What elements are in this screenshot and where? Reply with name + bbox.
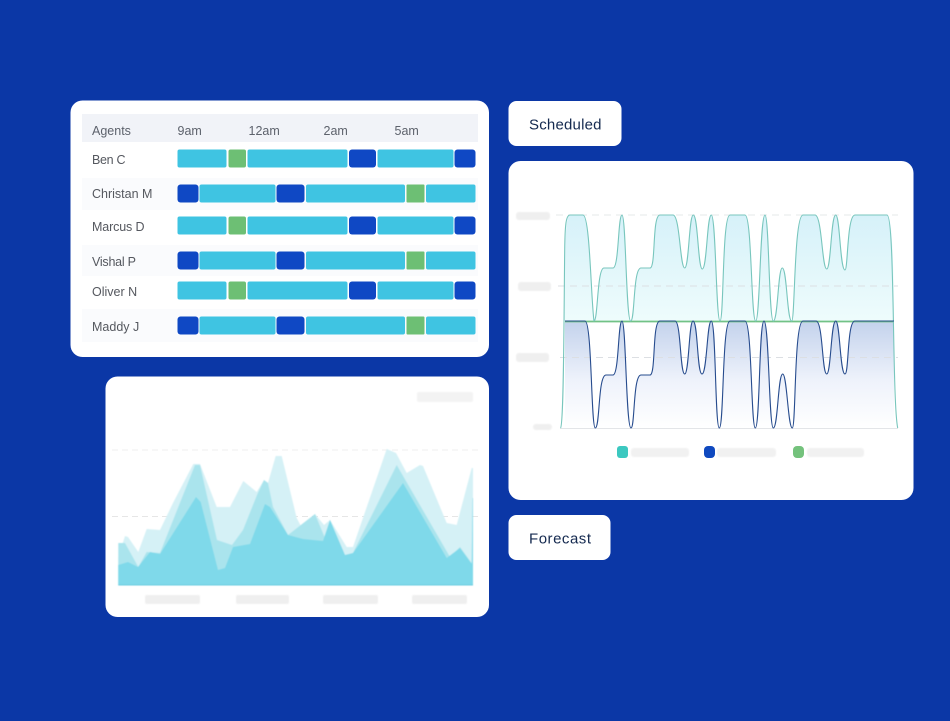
y axis label placeholders (516, 212, 552, 430)
filled area: lower series (565, 321, 894, 428)
x axis label placeholders (145, 595, 467, 604)
panel: area chart (106, 376, 489, 617)
panel: scheduled line chart (508, 161, 914, 500)
area layers (118, 449, 473, 585)
row: Ben C (92, 150, 476, 168)
gridlines (556, 215, 898, 428)
table header row: 2am (324, 124, 348, 138)
legend placeholder pill (417, 392, 473, 402)
row: Ben C: Ben C (92, 153, 126, 167)
label: Forecast (508, 515, 610, 560)
label: Scheduled (508, 101, 622, 146)
row: Maddy J (92, 316, 476, 334)
row: Marcus D: Marcus D (92, 220, 144, 234)
chart legend (617, 446, 864, 458)
panel: agent schedule table (70, 100, 489, 357)
table header row: Agents (92, 124, 131, 138)
teal line: upper series (560, 215, 898, 428)
table header row: 5am (394, 124, 419, 138)
row: Maddy J: Maddy J (92, 320, 139, 334)
row: Christan M (92, 184, 476, 202)
row: Oliver N (92, 282, 476, 300)
row: Vishal P (92, 252, 476, 270)
table header row: 12am (248, 124, 280, 138)
row: Christan M: Christan M (92, 187, 152, 201)
row: Marcus D (92, 216, 476, 234)
filled area: upper series (564, 215, 894, 321)
label: Forecast: Forecast (529, 530, 592, 548)
row: Vishal P: Vishal P (92, 255, 136, 269)
row: Oliver N: Oliver N (92, 285, 137, 299)
table header row: 9am (178, 124, 202, 138)
label: Scheduled: Scheduled (529, 116, 602, 134)
green centre line (565, 320, 894, 322)
dark line: lower series (565, 321, 894, 428)
table header row (82, 114, 478, 142)
